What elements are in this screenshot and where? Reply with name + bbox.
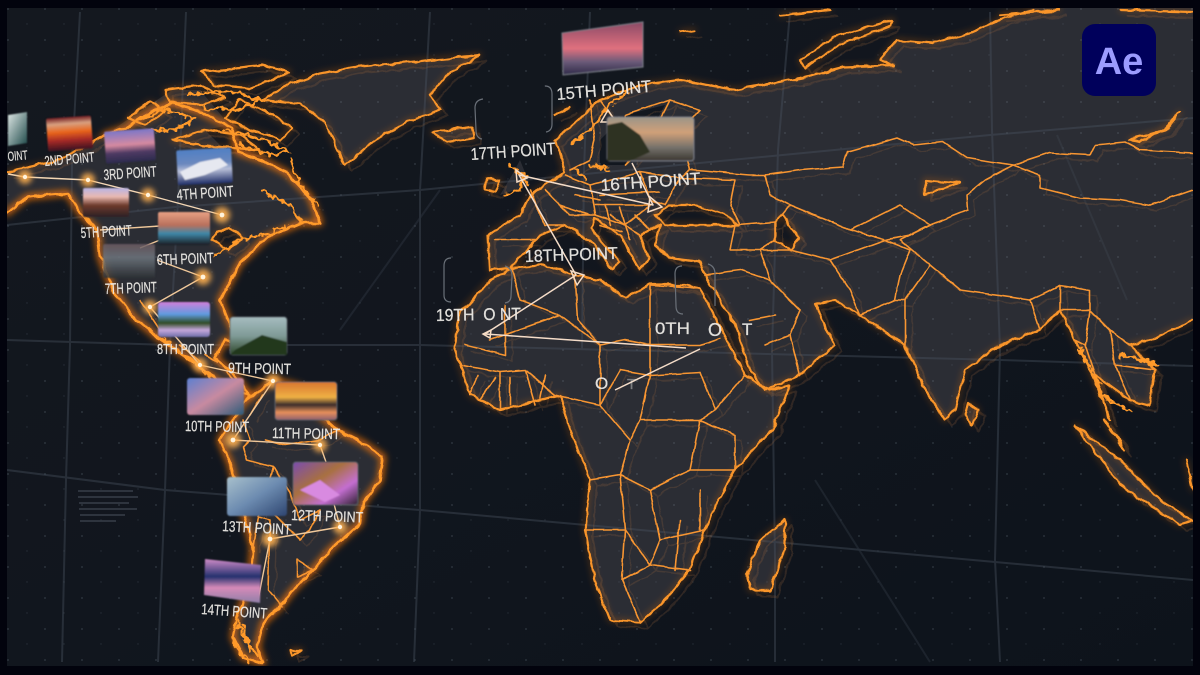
point labels: 6TH POINT bbox=[157, 250, 214, 269]
point labels: 4TH POINT bbox=[176, 183, 234, 204]
point labels: 19TH O NT bbox=[436, 305, 521, 325]
point labels: 18TH POINT bbox=[524, 244, 618, 266]
point labels: 5TH POINT bbox=[80, 222, 132, 242]
point labels bbox=[7, 77, 752, 623]
point labels: 0TH bbox=[655, 319, 690, 338]
point labels: T bbox=[742, 320, 752, 339]
small legend text block bbox=[78, 490, 138, 522]
point labels: T bbox=[627, 376, 636, 393]
point labels: 16TH POINT bbox=[600, 169, 701, 195]
point labels: 9TH POINT bbox=[228, 360, 291, 378]
After Effects badge: Ae bbox=[1095, 41, 1143, 83]
point labels: 8TH POINT bbox=[157, 341, 214, 358]
dense coastline detail bbox=[140, 90, 1160, 662]
After Effects badge bbox=[1082, 24, 1156, 96]
Americas outlines bbox=[7, 103, 383, 663]
point labels: 7TH POINT bbox=[105, 279, 157, 298]
point labels: 17TH POINT bbox=[470, 139, 556, 164]
point labels: OINT bbox=[7, 147, 28, 164]
photo thumbnails bbox=[8, 22, 694, 603]
country borders bbox=[140, 100, 1193, 622]
point labels: 10TH POINT bbox=[185, 418, 249, 436]
empty photo frames bbox=[444, 86, 715, 314]
glowing route nodes bbox=[18, 170, 347, 547]
point labels: O bbox=[708, 320, 722, 340]
point labels: 12TH POINT bbox=[291, 507, 363, 527]
point labels: 15TH POINT bbox=[556, 77, 652, 104]
point labels: 2ND POINT bbox=[44, 149, 95, 169]
point labels: 3RD POINT bbox=[103, 163, 157, 184]
route lines bbox=[8, 163, 700, 600]
point labels: O bbox=[595, 374, 608, 393]
point labels: 11TH POINT bbox=[272, 425, 340, 443]
triangle markers bbox=[483, 110, 662, 338]
point labels: 13TH POINT bbox=[222, 518, 292, 539]
point labels: 14TH POINT bbox=[201, 601, 268, 623]
